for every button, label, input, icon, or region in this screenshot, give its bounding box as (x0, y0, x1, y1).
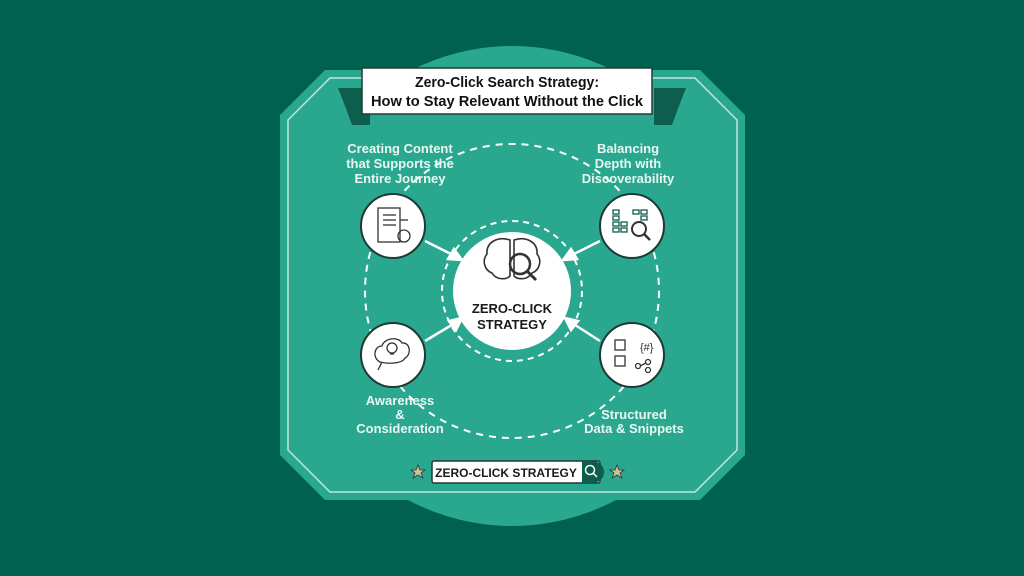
label: awareness: Consideration (356, 421, 444, 436)
label: creating content: Entire Journey (354, 171, 446, 186)
label: balancing depth: Balancing (597, 141, 659, 156)
node: structured data (600, 323, 664, 387)
label: creating content: Creating Content (347, 141, 453, 156)
panel: background badge (280, 46, 745, 526)
label: awareness: Awareness (366, 393, 434, 408)
node: lightbulb (361, 323, 425, 387)
title banner: Zero-Click Search Strategy: (415, 74, 599, 91)
label: awareness (356, 393, 444, 436)
search bar (432, 461, 604, 483)
label: awareness: & (395, 407, 405, 422)
center hub: ZERO-CLICK (472, 301, 553, 316)
label: creating content: that Supports the (346, 156, 454, 171)
center hub: STRATEGY (477, 317, 547, 332)
label: structured data: Structured (601, 407, 667, 422)
node: data grid magnifier (600, 194, 664, 258)
title banner: How to Stay Relevant Without the Click (371, 93, 644, 110)
icon: brain with magnifier (484, 239, 540, 280)
center hub (442, 221, 582, 361)
search bar: ZERO-CLICK STRATEGY (435, 466, 577, 480)
label: balancing depth: Discoverability (582, 171, 675, 186)
node: content scroll (361, 194, 425, 258)
label: structured data: Data & Snippets (584, 421, 684, 436)
icon: stars (411, 465, 624, 478)
label: creating content (346, 141, 454, 186)
label: balancing depth: Depth with (595, 156, 661, 171)
arrows to center (425, 241, 600, 341)
node: structured data: {#} (640, 342, 654, 354)
outer dashed cycle (365, 144, 659, 438)
title banner (338, 68, 686, 125)
label: balancing depth (582, 141, 675, 186)
label: structured data (584, 407, 684, 436)
